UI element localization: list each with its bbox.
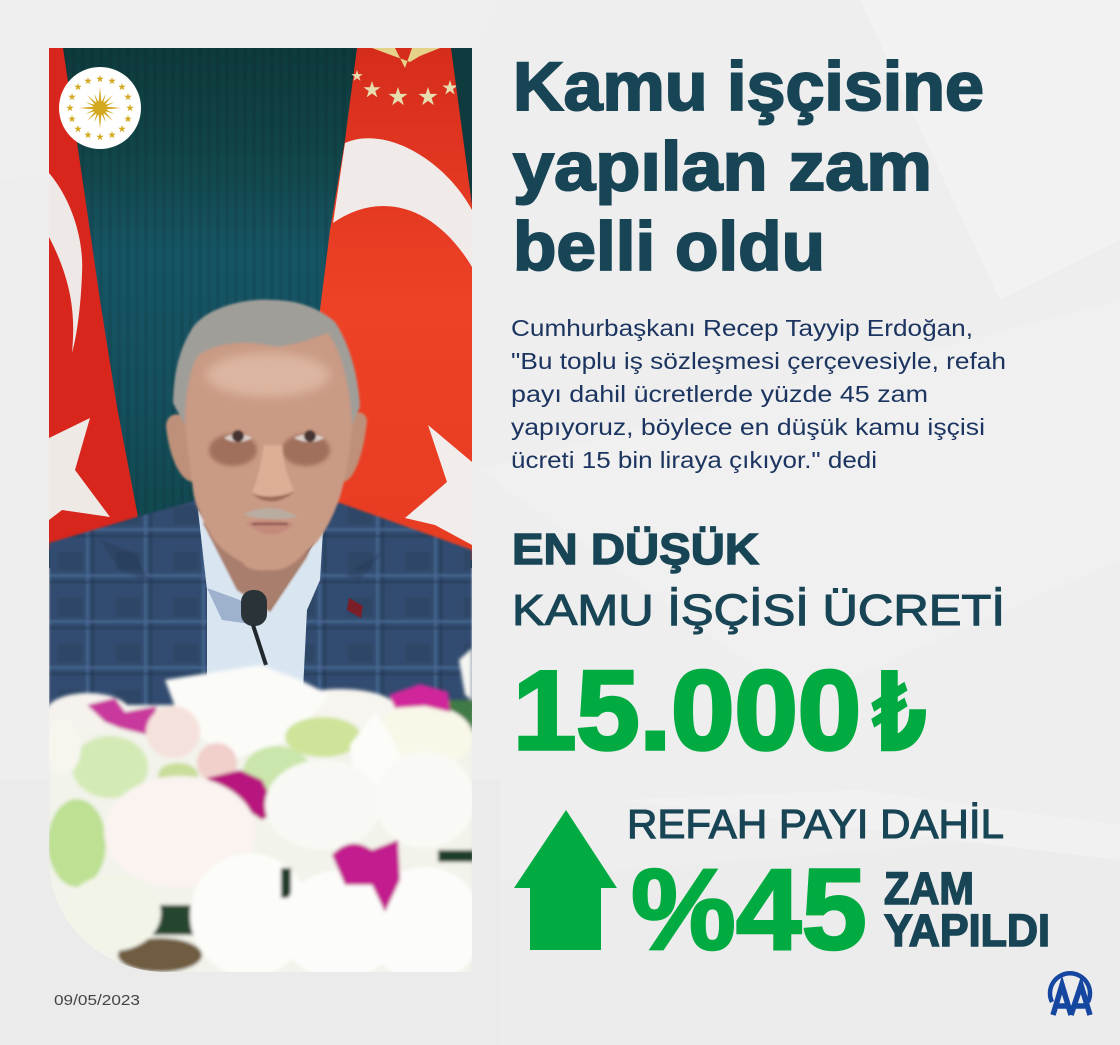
photo: president speaking in front of flags and flowers [45,48,483,983]
icon: Anadolu Agency logo [1050,973,1090,1015]
text: zam yapıldı [884,863,1050,956]
shirt [198,510,323,690]
head [166,300,367,571]
title: Kamu işçisine [513,48,984,125]
jacket [49,500,472,710]
neck [202,522,312,613]
microphone [241,590,267,665]
body text: quote [511,315,1006,473]
body text: quote: Cumhurbaşkanı Recep Tayyip Erdoğan, [511,315,973,341]
presidency emblem [59,67,141,149]
flower arrangement [45,648,483,983]
text: zam yapıldı: ZAM [884,863,974,914]
photo backdrop: teal curtain [49,48,472,568]
heading: en düşük: EN DÜŞÜK [512,525,759,574]
emblem stars [66,75,134,140]
right flag [320,48,472,560]
lapel pin [347,598,363,618]
left flag [49,48,138,550]
body text: quote: payı dahil ücretlerde yüzde 45 zam [511,381,928,407]
icon: up arrow [514,810,617,950]
wage figure: 15.000 [513,648,861,773]
body text: quote: ücreti 15 bin liraya çıkıyor." dedi [511,447,877,473]
body text: quote: "Bu toplu iş sözleşmesi çerçevesiyle, refah [511,348,1006,374]
date: 09/05/2023 [54,993,140,1009]
title [513,48,984,285]
wage figure: ₺ [872,652,927,773]
body text: quote: yapıyoruz, böylece en düşük kamu işçisi [511,414,985,440]
text: zam yapıldı: YAPILDI [884,905,1050,956]
text: refah payı dahil: REFAH PAYI DAHİL [627,801,1004,847]
title: yapılan zam [513,128,932,205]
emblem sun [79,87,121,129]
shirt collar shadow [207,588,246,624]
raise figure: %45 [631,846,867,974]
title: belli oldu [513,208,825,285]
heading: kamu işçisi ücreti: KAMU İŞÇİSİ ÜCRETİ [512,586,1005,635]
